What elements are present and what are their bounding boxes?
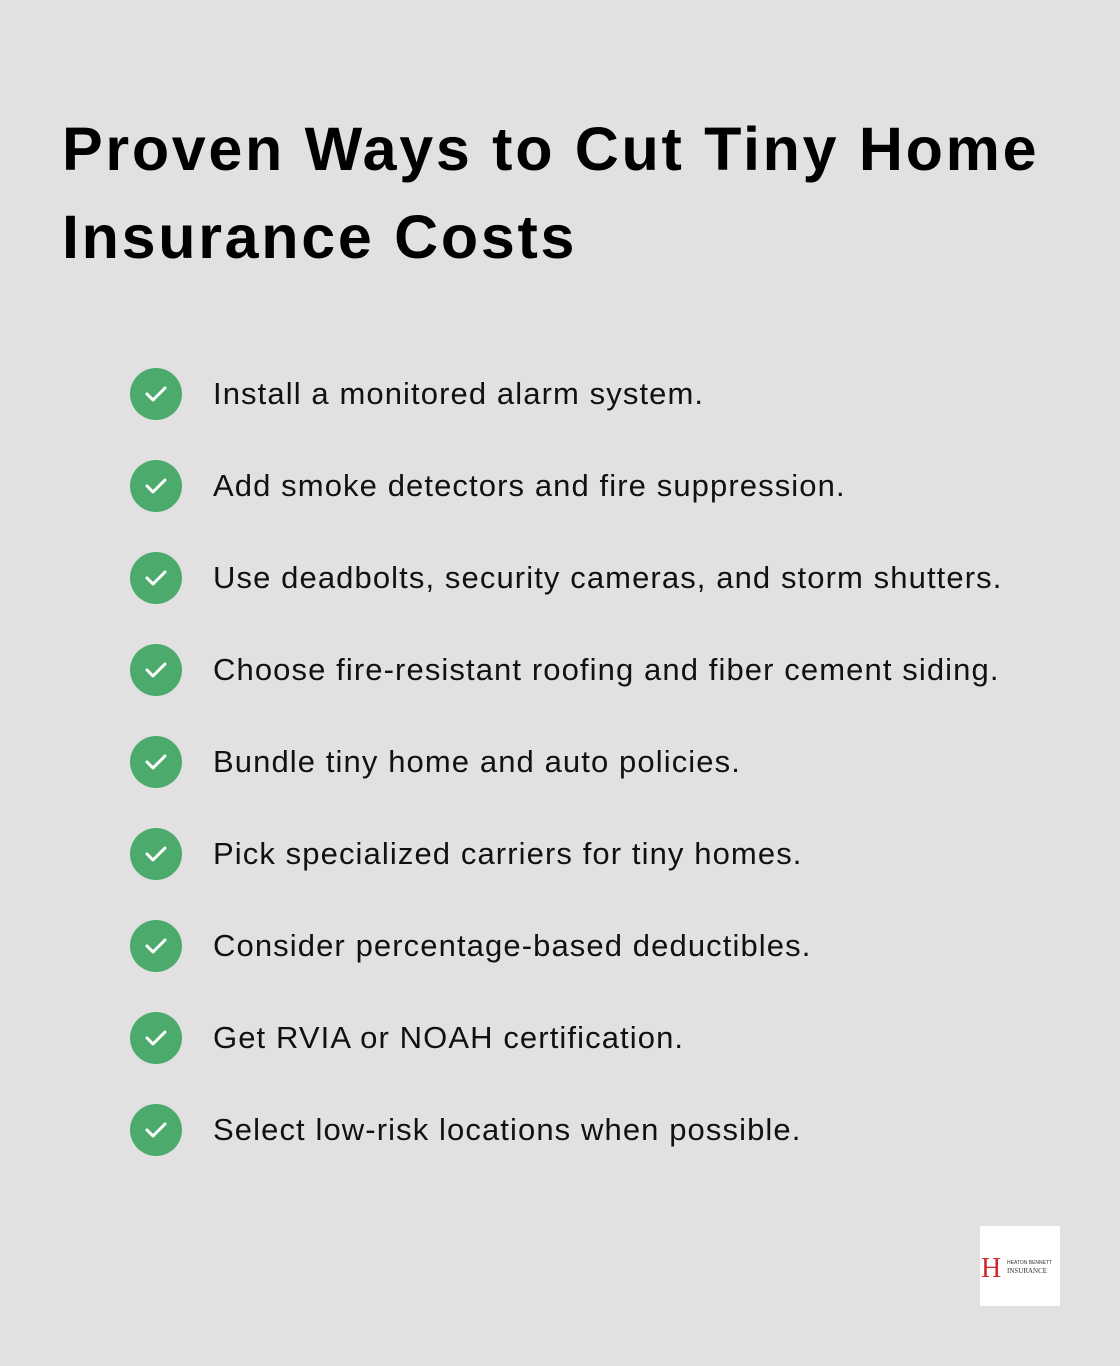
item 3 [130, 552, 1002, 604]
logo: HEATON BENNETT [1007, 1260, 1052, 1266]
item 6 [130, 828, 803, 880]
item 7 [130, 920, 811, 972]
item 9 [130, 1104, 801, 1156]
item 5: Bundle tiny home and auto policies. [213, 744, 741, 779]
item 9: Select low-risk locations when possible. [213, 1112, 801, 1147]
item 4 [130, 644, 1000, 696]
item 1 [130, 368, 704, 420]
item 8 [130, 1012, 684, 1064]
item 8: Get RVIA or NOAH certification. [213, 1020, 684, 1055]
item 4: Choose fire-resistant roofing and fiber cement siding. [213, 652, 1000, 687]
item 1: Install a monitored alarm system. [213, 376, 704, 411]
item 5 [130, 736, 741, 788]
logo [980, 1226, 1060, 1306]
title: Proven Ways to Cut Tiny Home Insurance Costs [62, 115, 1039, 271]
item 2 [130, 460, 846, 512]
item 7: Consider percentage-based deductibles. [213, 928, 811, 963]
logo: H [981, 1253, 1001, 1284]
item 2: Add smoke detectors and fire suppression. [213, 468, 846, 503]
logo: INSURANCE [1007, 1267, 1047, 1275]
item 6: Pick specialized carriers for tiny homes. [213, 836, 803, 871]
item 3: Use deadbolts, security cameras, and storm shutters. [213, 560, 1002, 595]
